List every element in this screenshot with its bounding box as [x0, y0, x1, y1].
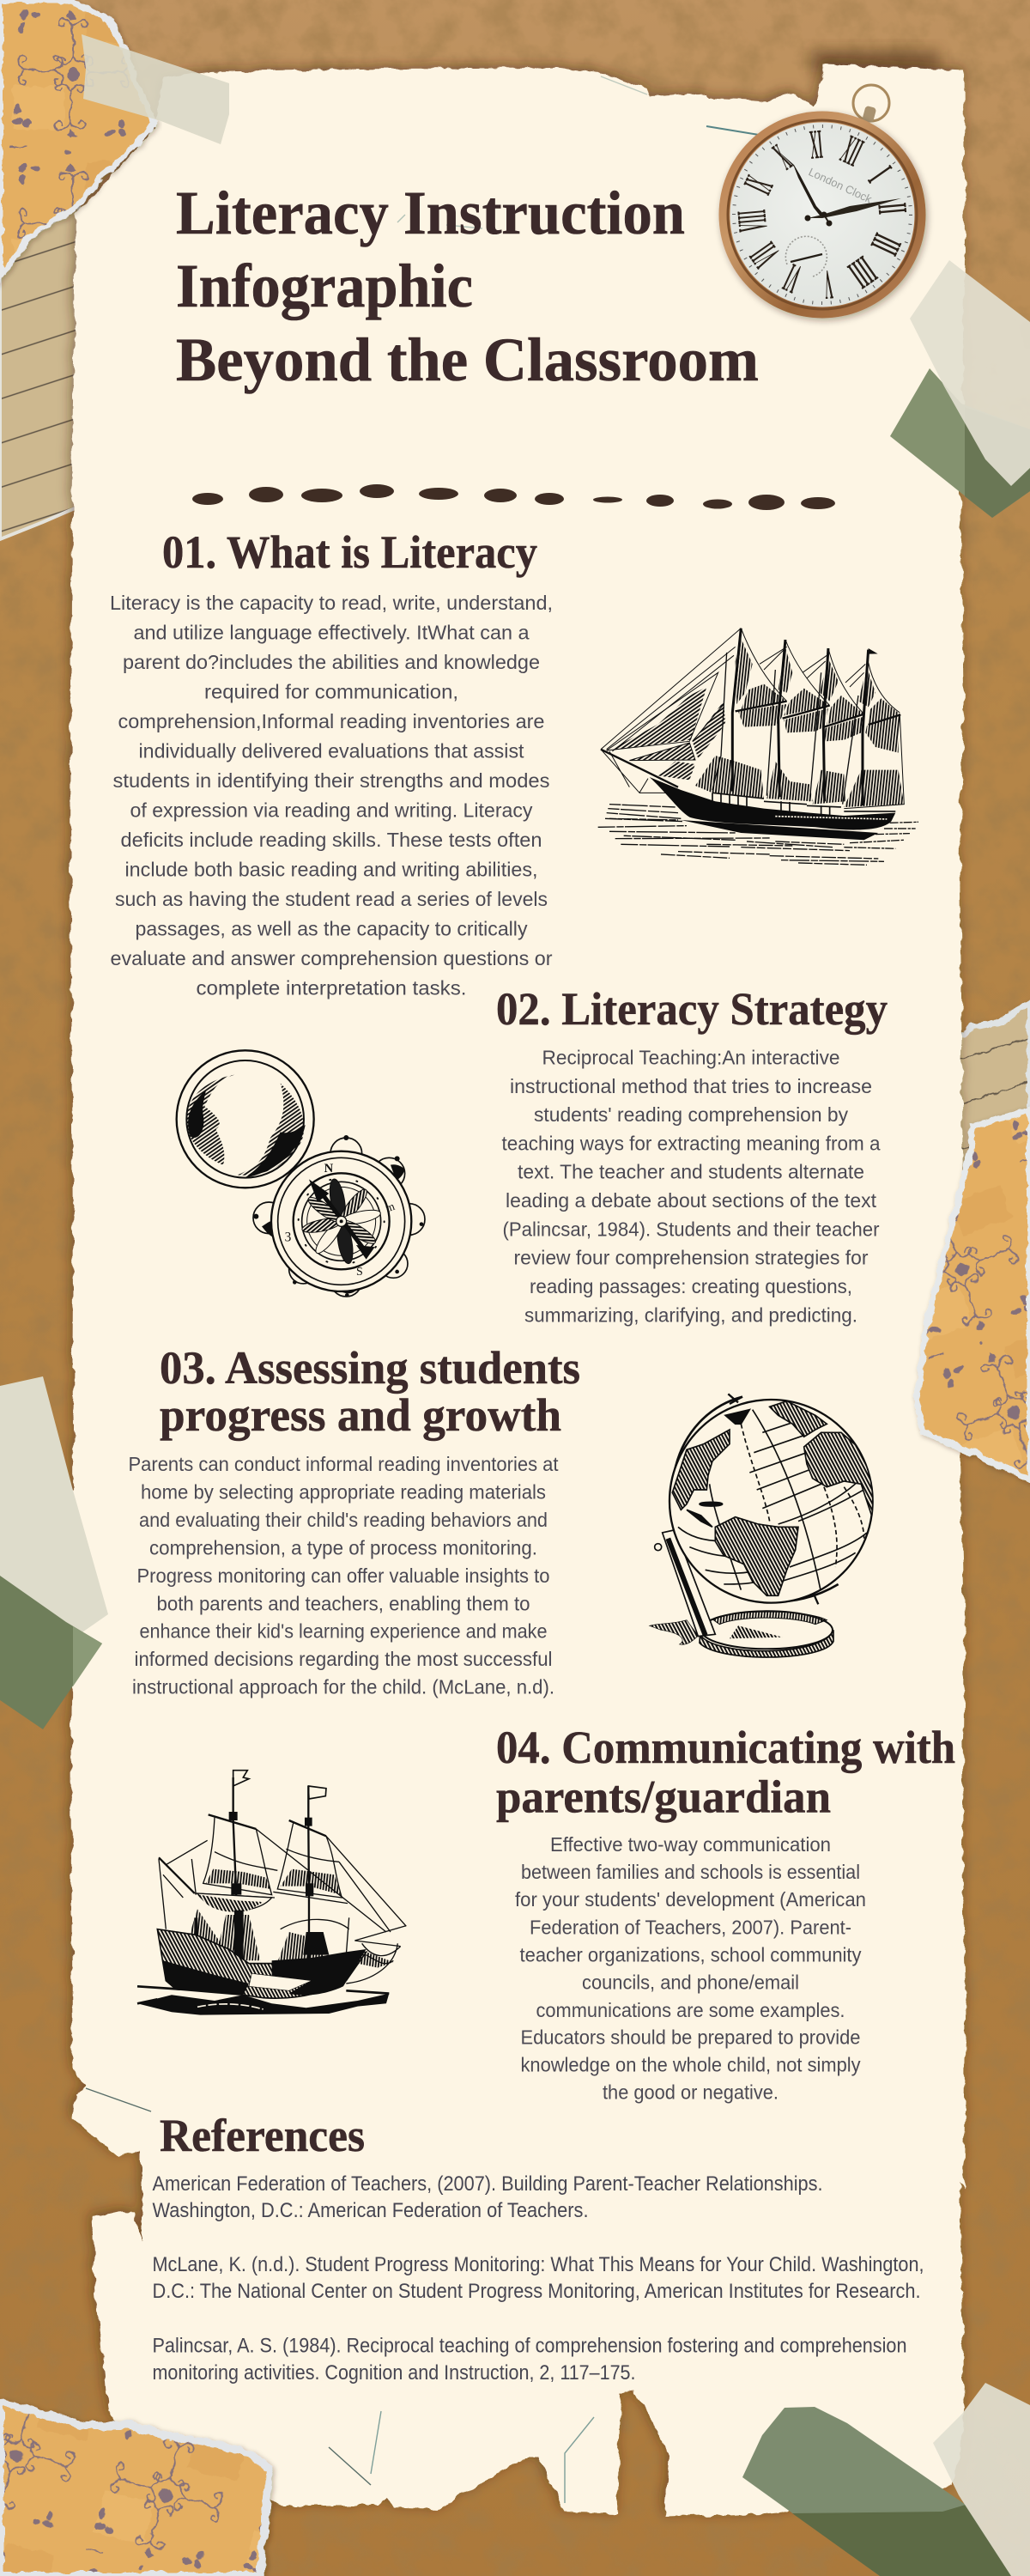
body text: section 02: Reciprocal Teaching:An interactive [542, 1046, 839, 1068]
heading: 01: 01. What is Literacy [162, 526, 537, 578]
references heading: References [160, 2110, 365, 2161]
pocket watch clock: VII [741, 235, 788, 276]
heading: 04 [496, 1722, 955, 1822]
body text: section 04: for your students' development (American [515, 1888, 866, 1911]
pocket watch clock: XI [808, 120, 824, 168]
pocket watch clock: VI [777, 255, 808, 303]
body text: section 02: teaching ways for extracting meaning from a [501, 1132, 881, 1154]
body text: section 04: Educators should be prepared to provide [520, 2026, 860, 2049]
body text: section 02: review four comprehension strategies for [513, 1247, 869, 1269]
body text: section 02: reading passages: creating questions, [530, 1275, 852, 1297]
body text: section 01: include both basic reading and writing abilities, [125, 859, 537, 881]
references list: Washington, D.C.: American Federation of Teachers. [153, 2199, 589, 2222]
body text: section 01: parent do?includes the abilities and knowledge [123, 651, 540, 673]
body text: section 01: passages, as well as the capacity to critically [136, 917, 528, 939]
body text: section 03 [129, 1453, 559, 1698]
body text: section 03: and evaluating their child's reading behaviors and [139, 1509, 548, 1531]
body text: section 04: teacher organizations, school community [520, 1944, 862, 1966]
body text: section 01: such as having the student read a series of levels [115, 888, 548, 910]
pocket watch clock: XII [834, 125, 869, 175]
pocket watch clock: III [862, 228, 911, 261]
body text: section 01: and utilize language effectively. ItWhat can a [134, 622, 530, 644]
body text: section 02: instructional method that tries to increase [510, 1075, 872, 1097]
references list [153, 2172, 924, 2385]
pocket watch clock: VIII [728, 209, 776, 234]
heading: 02: 02. Literacy Strategy [496, 983, 888, 1035]
body text: section 03: Parents can conduct informal reading inventories at [129, 1453, 559, 1475]
body text: section 04: Effective two-way communication [550, 1833, 831, 1856]
references list: D.C.: The National Center on Student Progress Monitoring, American Institutes for Research. [153, 2280, 920, 2303]
pocket watch clock: I [859, 159, 900, 190]
pocket watch clock: London Clock [807, 165, 875, 206]
illustration: open compass: 3 [285, 1230, 292, 1245]
title: Literacy Instruction [176, 179, 685, 247]
right tape pair: green and beige [890, 260, 1030, 518]
wavy dash divider [192, 484, 835, 510]
pocket watch clock [719, 85, 925, 318]
right ornamental paper [917, 1110, 1030, 1479]
title: Beyond the Classroom [176, 325, 759, 394]
body text: section 04 [515, 1833, 866, 2104]
pocket watch clock: V [822, 261, 834, 309]
body text: section 04: between families and schools is essential [521, 1861, 860, 1883]
body text: section 02: leading a debate about sections of the text [506, 1189, 876, 1212]
bottom-left ornamental paper [0, 2402, 270, 2576]
illustration: open compass: m [384, 1200, 397, 1215]
body text: section 03: instructional approach for the child. (McLane, n.d). [132, 1676, 554, 1698]
body text: section 01: of expression via reading and writing. Literacy [130, 799, 533, 821]
references list: McLane, K. (n.d.). Student Progress Monitoring: What This Means for Your Child. Washington, [153, 2253, 924, 2276]
heading: 03: progress and growth [160, 1389, 561, 1441]
references list: Palincsar, A. S. (1984). Reciprocal teaching of comprehension fostering and comprehension [153, 2334, 906, 2358]
body text: section 04: Federation of Teachers, 2007). Parent- [530, 1916, 851, 1938]
body text: section 01: deficits include reading skills. These tests often [120, 829, 542, 851]
body text: section 04: councils, and phone/email [582, 1971, 799, 1994]
pocket watch clock: II [869, 201, 916, 216]
heading: 03 [160, 1342, 580, 1441]
top-left tape [82, 34, 229, 144]
pocket watch clock: X [765, 135, 798, 179]
body text: section 03: comprehension, a type of process monitoring. [149, 1537, 537, 1559]
heading: 03: 03. Assessing students [160, 1342, 580, 1394]
body text: section 02: summarizing, clarifying, and predicting. [524, 1303, 857, 1326]
heading: 04: parents/guardian [496, 1771, 831, 1822]
body text: section 03: both parents and teachers, enabling them to [156, 1592, 530, 1614]
body text: section 03: Progress monitoring can offer valuable insights to [137, 1564, 549, 1587]
body text: section 01: Literacy is the capacity to read, write, understand, [110, 592, 553, 614]
references list: American Federation of Teachers, (2007). Building Parent-Teacher Relationships. [153, 2172, 822, 2196]
body text: section 01: evaluate and answer comprehension questions or [110, 947, 553, 969]
paper crack marks [86, 76, 759, 2503]
title [176, 179, 759, 394]
body text: section 03: enhance their kid's learning experience and make [139, 1620, 548, 1643]
illustration: open compass: N [324, 1162, 334, 1176]
illustration: globe on stand [650, 1394, 876, 1657]
body text: section 01: individually delivered evaluations that assist [139, 740, 524, 762]
body text: section 04: the good or negative. [603, 2081, 779, 2104]
body text: section 03: informed decisions regarding the most successful [134, 1648, 553, 1670]
body text: section 01: students in identifying their strengths and modes [113, 769, 549, 792]
body text: section 01: required for communication, [204, 680, 458, 702]
heading: 04: 04. Communicating with [496, 1722, 955, 1773]
left lined paper scrap [0, 206, 79, 539]
body text: section 03: home by selecting appropriate reading materials [141, 1481, 546, 1504]
left tape pair: beige and green [0, 1376, 108, 1729]
body text: section 02: text. The teacher and students alternate [518, 1161, 864, 1183]
body text: section 04: communications are some examples. [536, 1999, 845, 2021]
illustration: open compass [177, 1050, 425, 1297]
right lined paper scrap [917, 1003, 1030, 1202]
body text: section 01: complete interpretation tasks. [196, 977, 467, 999]
body text: section 02: students' reading comprehension by [534, 1103, 848, 1126]
illustration: open compass: S [356, 1266, 363, 1279]
body text: section 02: (Palincsar, 1984). Students and their teacher [503, 1218, 880, 1240]
pocket watch clock: IX [734, 169, 782, 200]
references list: monitoring activities. Cognition and Instruction, 2, 117–175. [153, 2361, 635, 2385]
illustration: schooner ship [598, 629, 918, 865]
title: Infographic [176, 252, 473, 320]
bottom-right tape pair: green and beige [742, 2383, 1030, 2576]
top-left ornamental paper [0, 0, 154, 277]
illustration: galleon ship [137, 1771, 406, 2015]
body text: section 04: knowledge on the whole child, not simply [520, 2054, 861, 2076]
body text: section 02 [501, 1046, 881, 1326]
body text: section 01: comprehension,Informal reading inventories are [118, 710, 544, 732]
body text: section 01 [110, 592, 553, 999]
pocket watch clock: IIII [841, 247, 885, 297]
